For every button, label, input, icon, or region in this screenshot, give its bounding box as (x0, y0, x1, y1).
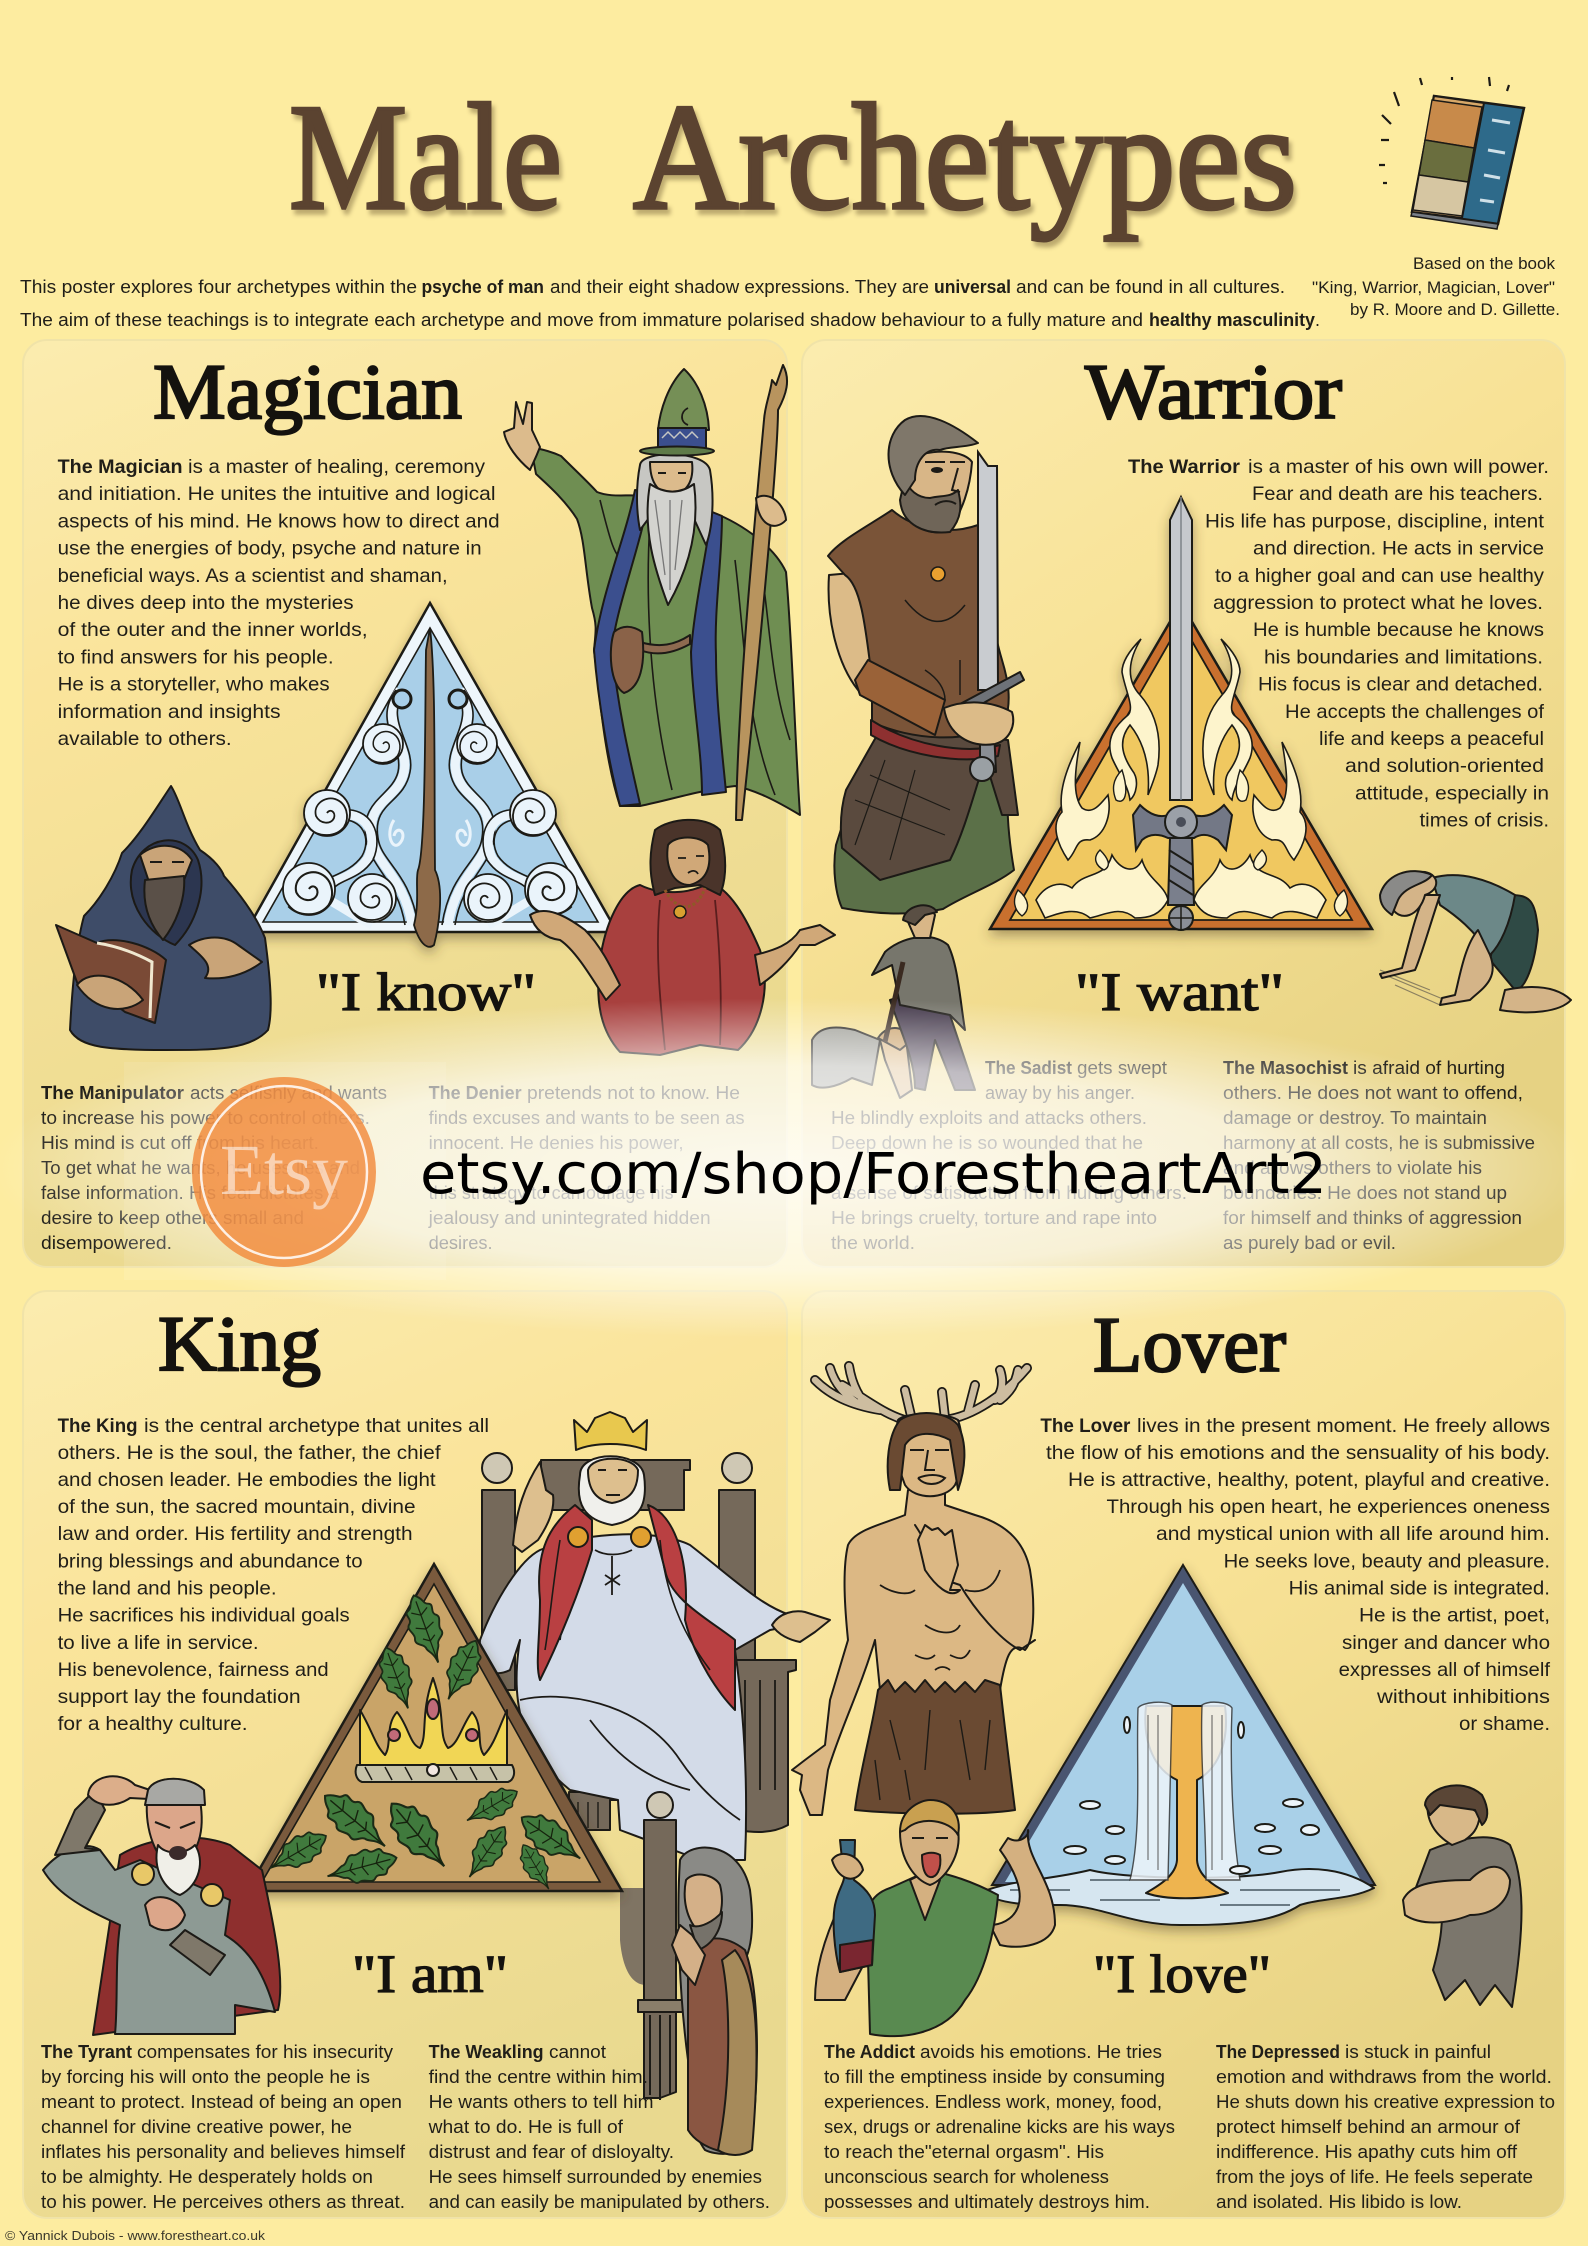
description text: He sacrifices his individual goals (58, 1605, 350, 1627)
description text: Through his open heart, he experiences oneness (1106, 1496, 1550, 1518)
description text: He is the artist, poet, (1359, 1605, 1550, 1627)
description text: His life has purpose, discipline, intent (1205, 510, 1545, 532)
shadow text: Sadist: The Sadist (985, 1058, 1072, 1078)
shadow text: Depressed: The Depressed (1216, 2042, 1340, 2062)
intro text: psyche of man (422, 277, 544, 297)
shadow text: Sadist: the world. (831, 1233, 915, 1253)
description text: His benevolence, fairness and (58, 1659, 329, 1681)
panel background (23, 1291, 787, 2218)
shadow text: Masochist: boundaries. He does not stand up (1223, 1183, 1507, 1203)
shadow text: Weakling: distrust and fear of disloyalty. (429, 2142, 674, 2162)
panel background (802, 340, 1565, 1267)
shadow text: Manipulator: The Manipulator (41, 1083, 184, 1103)
shadow text: Addict: to reach the"eternal orgasm". His (824, 2142, 1104, 2162)
description text: singer and dancer who (1342, 1632, 1550, 1654)
triangle: chalice and water (982, 1565, 1375, 1925)
description text: life and keeps a peaceful (1319, 728, 1544, 750)
intro text: universal (934, 277, 1011, 297)
figure: King on throne (480, 1412, 830, 2100)
description text: He seeks love, beauty and pleasure. (1224, 1550, 1550, 1572)
shadow text: Weakling: find the centre within him. (429, 2067, 648, 2087)
intro text: healthy masculinity (1149, 310, 1315, 330)
shadow text: Tyrant: meant to protect. Instead of being an open (41, 2092, 402, 2112)
description text: to a higher goal and can use healthy (1215, 565, 1544, 587)
description text: to live a life in service. (58, 1632, 259, 1654)
shadow text: Masochist: others. He does not want to offend, (1223, 1083, 1523, 1103)
shadow text: Addict: unconscious search for wholeness (824, 2167, 1109, 2187)
shadow text: Manipulator: false information. His fear dictates a (41, 1183, 340, 1203)
figure: Manipulator (56, 786, 271, 1050)
shadow text: Addict: possesses and ultimately destroys him. (824, 2192, 1150, 2212)
shadow text: Depressed: and isolated. His libido is low. (1216, 2192, 1462, 2212)
description text: The King (58, 1415, 138, 1437)
shadow text: Masochist: as purely bad or evil. (1223, 1233, 1396, 1253)
shadow text: Masochist: The Masochist (1223, 1058, 1348, 1078)
shadow text: Depressed: from the joys of life. He feels seperate (1216, 2167, 1533, 2187)
description text: attitude, especially in (1355, 782, 1549, 804)
shadow text: Addict (824, 2042, 1175, 2212)
intro text: The aim of these teachings is to integrate each archetype and move from immature polarised shadow behaviour to a fully mature and (20, 310, 1143, 330)
shadow text: Sadist: He brings cruelty, torture and rape into (831, 1208, 1157, 1228)
top-panel shadow texts (41, 1058, 1535, 1253)
motto: "I love" (1093, 1944, 1271, 2004)
description text: His focus is clear and detached. (1258, 674, 1543, 696)
shadow text: Weakling: cannot (549, 2042, 606, 2062)
shadow text: Depressed: indifference. His apathy cuts him off (1216, 2142, 1518, 2162)
figure: Magician (504, 365, 800, 820)
shadow text: Tyrant: inflates his personality and believes himself (41, 2142, 406, 2162)
description text (58, 456, 500, 750)
shadow text: Denier: The Denier (429, 1083, 522, 1103)
shadow text: Manipulator: His mind is cut off from his heart. (41, 1133, 319, 1153)
description text: The Lover (1040, 1415, 1131, 1437)
panel background (23, 340, 787, 1267)
shadow text: Sadist: Deep down he is so wounded that he (831, 1133, 1143, 1153)
description text: for a healthy culture. (58, 1713, 248, 1735)
triangle: air swirls and wand (246, 603, 617, 947)
shadow text: Tyrant: by forcing his will onto the people he is (41, 2067, 370, 2087)
panel: Magician (23, 340, 835, 1267)
heading: King (158, 1300, 321, 1387)
shadow text: Sadist (831, 1058, 1187, 1253)
description text: and chosen leader. He embodies the light (58, 1469, 436, 1491)
shadow text: Weakling: He wants others to tell him (429, 2092, 654, 2112)
description text: information and insights (58, 701, 281, 723)
shadow text: Manipulator: To get what he wants, he uses lies and (41, 1158, 360, 1178)
footer credit: © Yannick Dubois - www.forestheart.co.uk (5, 2228, 266, 2243)
description text: The Magician (58, 456, 183, 478)
shadow text: Addict: sex, drugs or adrenaline kicks are his ways (824, 2117, 1175, 2137)
shadow text: Weakling: The Weakling (429, 2042, 544, 2062)
watermark: Etsy badge (124, 1062, 446, 1280)
motto: "I know" (316, 962, 536, 1022)
description text (1128, 456, 1549, 832)
shadow text: Tyrant: compensates for his insecurity (137, 2042, 393, 2062)
shadow text: Denier: innocent. He denies his power, (429, 1133, 684, 1153)
shadow text: Tyrant: to his power. He perceives others as threat. (41, 2192, 405, 2212)
description text: aggression to protect what he loves. (1213, 592, 1543, 614)
figure: Denier (530, 820, 835, 1055)
intro text (20, 277, 1320, 330)
heading: Warrior (1085, 348, 1342, 435)
shadow text: Manipulator (41, 1083, 387, 1253)
description text: He is attractive, healthy, potent, playful and creative. (1068, 1469, 1550, 1491)
motto: "I want" (1075, 962, 1284, 1022)
panel background (802, 1291, 1565, 2218)
triangle: crown and leaves (247, 1564, 622, 1895)
description text: He is a storyteller, who makes (58, 674, 330, 696)
description text: and direction. He acts in service (1253, 538, 1544, 560)
intro text: and their eight shadow expressions. They are (550, 277, 929, 297)
shadow text: Weakling (428, 2042, 770, 2212)
icon: book (1379, 77, 1524, 229)
shadow text: Depressed (1216, 2042, 1555, 2212)
shadow text: Manipulator: desire to keep others small and (41, 1208, 304, 1228)
description text: of the outer and the inner worlds, (58, 619, 368, 641)
shadow text: Depressed: He shuts down his creative expression to (1216, 2092, 1555, 2112)
description text: He accepts the challenges of (1285, 701, 1545, 723)
shadow text: Masochist: harmony at all costs, he is submissive (1223, 1133, 1535, 1153)
watermark: Etsy badge: Etsy (220, 1130, 348, 1210)
watermark haze (0, 990, 1588, 1340)
shadow text: Manipulator: acts selfishly and wants (190, 1083, 387, 1103)
description text: the land and his people. (58, 1578, 277, 1600)
shadow text: Weakling: He sees himself surrounded by enemies (429, 2167, 762, 2187)
shadow text: Masochist (1223, 1058, 1535, 1253)
description text: and solution-oriented (1345, 755, 1544, 777)
shadow text: Masochist: for himself and thinks of aggression (1223, 1208, 1522, 1228)
shadow text: Denier: this strategy to camouflage his (429, 1183, 674, 1203)
shadow text: Manipulator: disempowered. (41, 1233, 172, 1253)
figure: Tyrant (43, 1776, 280, 2035)
triangle: flames and sword (990, 497, 1372, 930)
description text: Fear and death are his teachers. (1252, 483, 1543, 505)
shadow text: Masochist: and allows others to violate his (1223, 1158, 1482, 1178)
description text: use the energies of body, psyche and nature in (58, 538, 482, 560)
description text: He is humble because he knows (1253, 619, 1544, 641)
shadow text: Tyrant: channel for divine creative power, he (41, 2117, 352, 2137)
intro text: . (1315, 310, 1320, 330)
intro text: This poster explores four archetypes within the (20, 277, 417, 297)
description text: the flow of his emotions and the sensuality of his body. (1046, 1442, 1550, 1464)
shadow text: Sadist: He blindly exploits and attacks others. (831, 1108, 1147, 1128)
shadow text: Tyrant: The Tyrant (41, 2042, 132, 2062)
shadow text: Sadist: a sense of satisfaction from hurting others. (831, 1183, 1187, 1203)
panel: Lover (792, 1291, 1565, 2218)
shadow text: Tyrant: to be almighty. He desperately holds on (41, 2167, 373, 2187)
description text (1040, 1415, 1551, 1735)
intro text: and can be found in all cultures. (1016, 277, 1285, 297)
figure: Sadist (812, 905, 975, 1098)
description text: lives in the present moment. He freely allows (1137, 1415, 1550, 1437)
figure: Warrior (828, 416, 1024, 913)
figure: Depressed (1403, 1785, 1522, 2007)
shadow text: Addict: to fill the emptiness inside by consuming (824, 2067, 1165, 2087)
description text: he dives deep into the mysteries (58, 592, 354, 614)
description text: The Warrior (1128, 456, 1240, 478)
description text: His animal side is integrated. (1289, 1578, 1550, 1600)
book credit: by R. Moore and D. Gillette. (1350, 300, 1560, 319)
title: Archetypes (633, 73, 1297, 241)
description text: beneficial ways. As a scientist and shaman, (58, 565, 448, 587)
description text: of the sun, the sacred mountain, divine (58, 1496, 416, 1518)
description text: aspects of his mind. He knows how to direct and (58, 510, 500, 532)
figure: Lover (792, 1366, 1035, 1815)
figure: Masochist (1380, 871, 1571, 1012)
description text: is the central archetype that unites all (144, 1415, 489, 1437)
motto: "I am" (352, 1944, 508, 2004)
description text: to find answers for his people. (58, 646, 334, 668)
shadow text: Weakling: what to do. He is full of (428, 2117, 624, 2137)
shadow text: Masochist: damage or destroy. To maintain (1223, 1108, 1487, 1128)
title: Male (289, 73, 562, 241)
description text: available to others. (58, 728, 232, 750)
shadow text: Tyrant (41, 2042, 406, 2212)
description text: and initiation. He unites the intuitive and logical (58, 483, 496, 505)
shadow text: Depressed: protect himself behind an armour of (1216, 2117, 1521, 2137)
description text: others. He is the soul, the father, the chief (58, 1442, 441, 1464)
heading: Magician (153, 348, 462, 435)
shadow text: Addict: The Addict (824, 2042, 915, 2062)
description text: without inhibitions (1376, 1686, 1550, 1708)
description text: is a master of healing, ceremony (188, 456, 485, 478)
shadow text: Denier: pretends not to know. He (527, 1083, 740, 1103)
description text: support lay the foundation (58, 1686, 301, 1708)
description text: law and order. His fertility and strength (58, 1523, 413, 1545)
title (289, 73, 1297, 241)
shadow text: Masochist: is afraid of hurting (1353, 1058, 1505, 1078)
panel: Warrior (802, 340, 1571, 1267)
shadow text: Sadist: away by his anger. (985, 1083, 1135, 1103)
description text: times of crisis. (1420, 810, 1549, 832)
shadow text: Manipulator: to increase his power to control others. (41, 1108, 370, 1128)
description text: expresses all of himself (1339, 1659, 1551, 1681)
description text: bring blessings and abundance to (58, 1550, 363, 1572)
description text: or shame. (1459, 1713, 1550, 1735)
shadow text: Addict: avoids his emotions. He tries (920, 2042, 1162, 2062)
book credit: "King, Warrior, Magician, Lover" (1312, 278, 1555, 297)
shadow text: Denier: finds excuses and wants to be seen as (429, 1108, 745, 1128)
shadow text: Addict: experiences. Endless work, money, food, (824, 2092, 1162, 2112)
book credit (1312, 254, 1560, 319)
description text: is a master of his own will power. (1248, 456, 1549, 478)
shadow text: Denier (428, 1083, 745, 1253)
book credit: Based on the book (1413, 254, 1555, 273)
shadow text: Depressed: emotion and withdraws from the world. (1216, 2067, 1552, 2087)
heading: Lover (1093, 1301, 1286, 1388)
figure: Addict (815, 1800, 1055, 2036)
figure: Weakling (672, 1848, 757, 2155)
description text: and mystical union with all life around him. (1156, 1523, 1550, 1545)
shadow text: Weakling: and can easily be manipulated by others. (429, 2192, 770, 2212)
shadow text: Denier: jealousy and unintegrated hidden (428, 1208, 711, 1228)
watermark: shop URL: etsy.com/shop/ForestheartArt2 (420, 1142, 1327, 1207)
panel: King (23, 1291, 830, 2218)
shadow text: Sadist: gets swept (1077, 1058, 1167, 1078)
shadow text: Depressed: is stuck in painful (1345, 2042, 1491, 2062)
description text: his boundaries and limitations. (1264, 646, 1543, 668)
description text (58, 1415, 489, 1735)
shadow text: Denier: desires. (429, 1233, 493, 1253)
